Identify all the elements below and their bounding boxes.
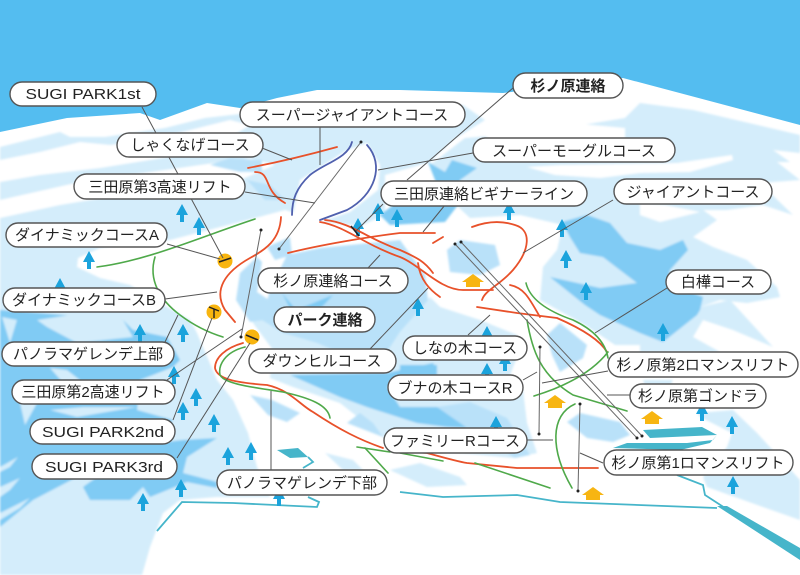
label: park connection: パーク連絡: [287, 311, 363, 329]
label: suginohara connection course: [258, 268, 408, 293]
label: mitahara no.3 lift: [74, 174, 245, 199]
label: mitahara beginner line: 三田原連絡ビギナーライン: [394, 186, 574, 203]
label: super giant course: [240, 102, 465, 127]
orange courses: [215, 147, 607, 468]
leader lines: [142, 88, 667, 470]
label: giant course: ジャイアントコース: [627, 184, 759, 201]
label: shirakaba course: [666, 270, 771, 294]
lodge houses: [462, 274, 663, 500]
label: panorama upper: [2, 342, 174, 366]
label: downhill course: ダウンヒルコース: [263, 353, 381, 370]
label: suginohara connection: 杉ノ原連絡: [530, 77, 606, 95]
label: suginohara connection course: 杉ノ原連絡コース: [273, 273, 393, 290]
label: dynamic course B: [3, 288, 165, 312]
label: mitahara no.3 lift: 三田原第3高速リフト: [88, 179, 232, 196]
label: park connection: [274, 307, 375, 332]
trees: [54, 202, 739, 511]
label: SUGI PARK2nd: [30, 419, 175, 444]
label: super giant course: スーパージャイアントコース: [256, 107, 448, 124]
label: suginohara connection: [513, 73, 623, 98]
label: suginohara no.1 romance lift: [604, 450, 793, 475]
label: shakunage course: しゃくなげコース: [130, 137, 250, 154]
label: super mogul course: スーパーモーグルコース: [492, 143, 656, 160]
label: shinanoki course: [403, 336, 527, 360]
label: suginohara no.2 romance lift: 杉ノ原第2ロマンスリフト: [616, 357, 790, 374]
label: mitahara no.2 lift: 三田原第2高速リフト: [21, 384, 165, 401]
label: SUGI PARK2nd: SUGI PARK2nd: [42, 424, 164, 441]
label: suginohara gondola: 杉ノ原第ゴンドラ: [638, 387, 758, 405]
label: panorama lower: パノラマゲレンデ下部: [227, 474, 377, 492]
purple courses: [292, 142, 376, 220]
label: dynamic course A: [6, 223, 167, 247]
rivers and ponds: [157, 427, 800, 560]
label: suginohara gondola: [630, 384, 766, 408]
label: dynamic course B: ダイナミックコースB: [12, 292, 156, 309]
label: shirakaba course: 白樺コース: [681, 274, 755, 291]
label: SUGI PARK1st: SUGI PARK1st: [26, 86, 141, 103]
label: buna course R: ブナの木コースR: [397, 379, 513, 397]
green courses: [97, 219, 627, 488]
label: shakunage course: [117, 133, 263, 157]
label: dynamic course A: ダイナミックコースA: [15, 227, 159, 244]
label: super mogul course: [473, 138, 675, 162]
label: mitahara beginner line: [381, 181, 587, 206]
label: panorama lower: [217, 470, 387, 495]
label: giant course: [614, 179, 772, 204]
label: mitahara no.2 lift: [12, 380, 175, 404]
label: SUGI PARK1st: [10, 82, 156, 106]
snow park markers: [206, 254, 260, 344]
label: downhill course: [249, 349, 396, 373]
label: family R course: ファミリーRコース: [390, 433, 520, 450]
label: SUGI PARK3rd: [32, 454, 177, 479]
label: buna course R: [388, 375, 523, 400]
label: shinanoki course: しなの木コース: [413, 340, 517, 357]
lifts: [240, 140, 644, 492]
label: SUGI PARK3rd: SUGI PARK3rd: [45, 459, 163, 476]
label: family R course: [384, 428, 527, 453]
label: suginohara no.2 romance lift: [608, 352, 798, 377]
label: suginohara no.1 romance lift: 杉ノ原第1ロマンスリフト: [611, 455, 785, 472]
label: panorama upper: パノラマゲレンデ上部: [13, 345, 163, 363]
